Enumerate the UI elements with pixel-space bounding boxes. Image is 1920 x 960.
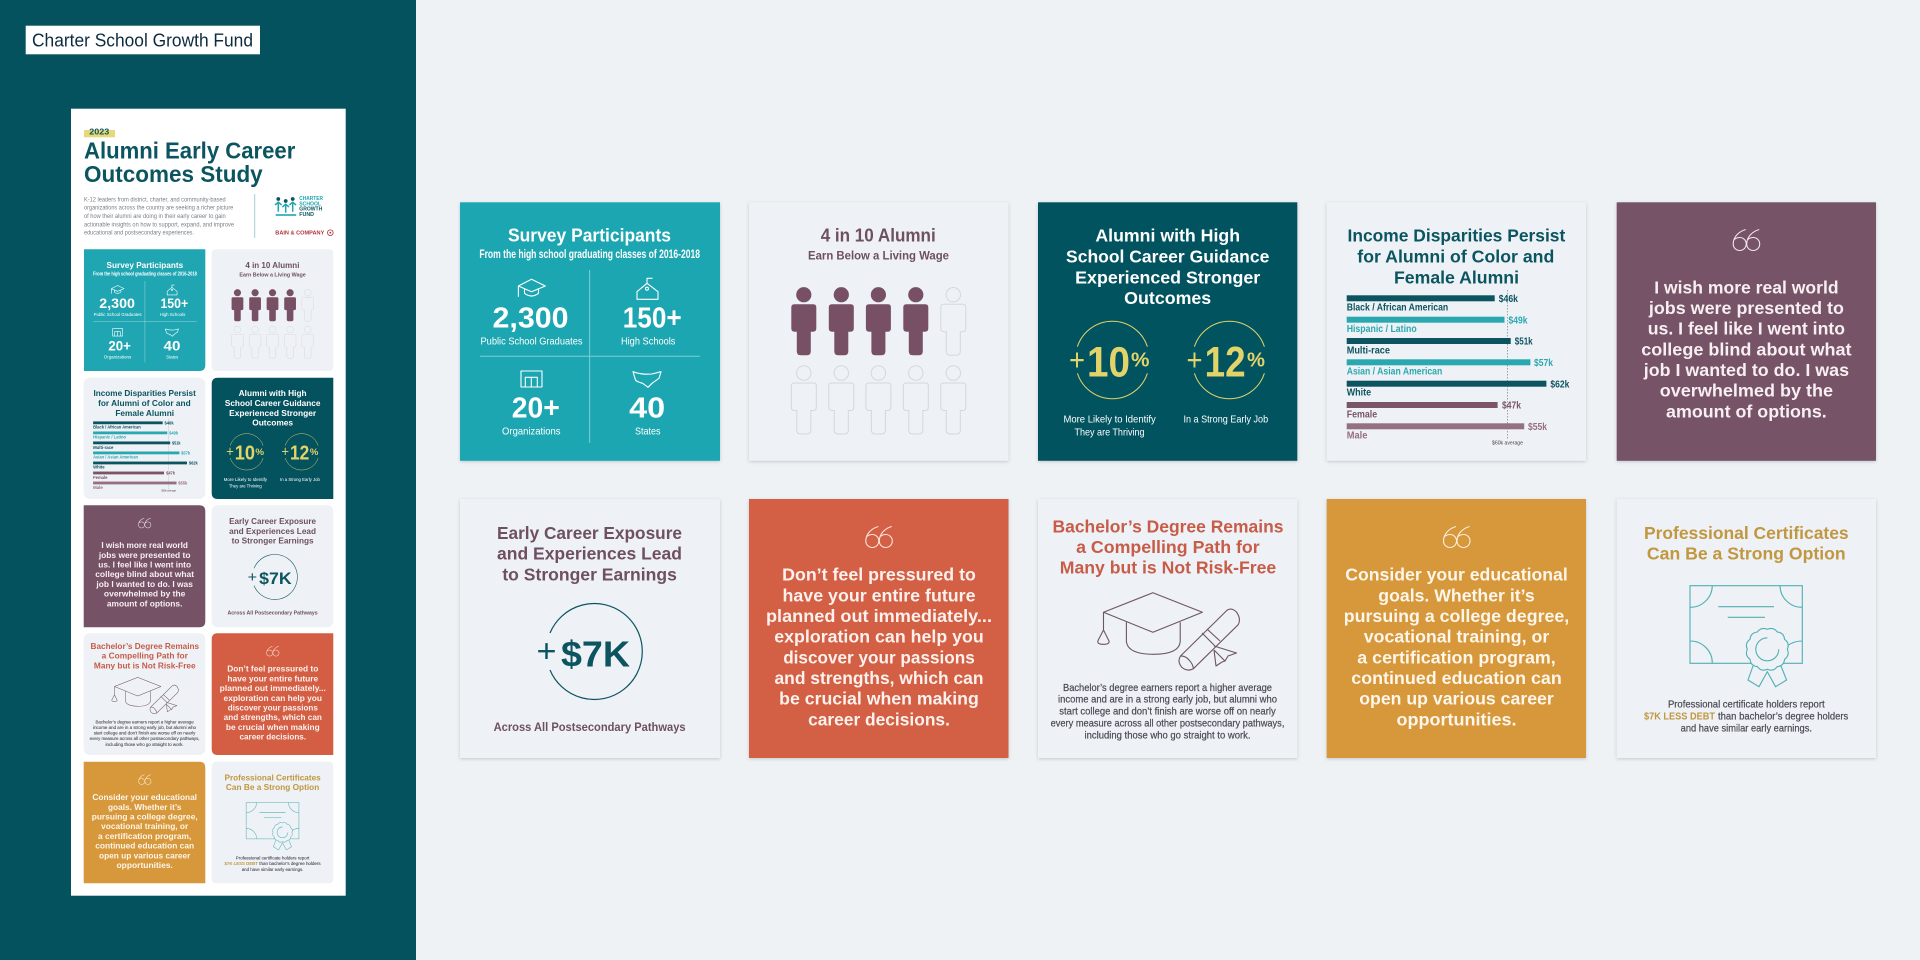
bar chart: Male (1347, 431, 1368, 442)
mini card: quote don't feel pressured: have your entire future (227, 674, 319, 683)
quote text: overwhelmed by the (1660, 381, 1833, 401)
bachelor heading: a Compelling Path for (1076, 537, 1260, 557)
survey number labels: Organizations (502, 425, 561, 437)
quote text: goals. Whether it’s (1378, 585, 1535, 605)
mini card: quote real world jobs: jobs were presented to (98, 551, 190, 560)
mini card: income disparities: Hispanic / Latino (93, 435, 126, 440)
guidance heading: Outcomes (1124, 288, 1211, 308)
mini card: quote real world jobs (84, 505, 205, 627)
bar chart: Black / African American (1347, 303, 1448, 314)
mini card: career guidance outcomes: % (255, 446, 265, 457)
mini card: early career exposure: and Experiences Lead (229, 527, 316, 536)
mini card: quote don't feel pressured: discover your passions (228, 704, 318, 713)
mini card: income disparities: Asian / Asian American (93, 455, 138, 460)
mini card: quote don't feel pressured: be crucial when making (226, 723, 320, 732)
panel: income disparities (1327, 202, 1586, 461)
survey heading: Survey Participants (508, 226, 671, 246)
quote text: a certification program, (1357, 647, 1556, 667)
mini card: income disparities: $62k (189, 461, 198, 466)
bar chart: Female (1347, 410, 1378, 421)
logo: Charter School Growth Fund: SCHOOL (299, 201, 322, 207)
mini card: quote real world jobs: job I wanted to do. I was (95, 580, 193, 589)
mini card: quote don't feel pressured (212, 633, 333, 755)
poster intro text: educational and postsecondary experiences. (84, 230, 194, 237)
income heading: Income Disparities Persist (1348, 226, 1565, 246)
survey heading: From the high school graduating classes of 2016-2018 (479, 249, 700, 261)
survey number labels: States (635, 425, 661, 437)
exposure heading: Early Career Exposure (497, 523, 682, 543)
quote text: opportunities. (1396, 709, 1516, 729)
certificates body text: than bachelor’s degree holders (1718, 711, 1848, 722)
quote text: planned out immediately... (766, 606, 992, 626)
mini card: income disparities: White (93, 465, 105, 470)
bar chart: Multi-race (1347, 346, 1390, 357)
quote text: job I wanted to do. I was (1643, 360, 1849, 380)
poster title (84, 138, 295, 187)
poster intro text: of how their alumni are doing in their early career to gain (84, 213, 226, 220)
survey heading (479, 226, 700, 261)
mini card: income disparities: $49k (169, 431, 178, 436)
mini card: income disparities: Black / African American (93, 425, 141, 430)
stat labels (1063, 413, 1268, 439)
stat labels: In a Strong Early Job (1183, 413, 1268, 425)
poster year badge (84, 128, 115, 137)
bachelor body text: Bachelor’s degree earners report a higher average (1063, 683, 1272, 694)
mini card: income disparities: $51k (172, 441, 181, 446)
exposure heading: to Stronger Earnings (502, 564, 677, 584)
icon: quotation mark (1733, 230, 1760, 250)
mini card: income disparities (84, 378, 205, 499)
stats: +10% and +12%: + (1069, 342, 1085, 377)
quote text: continued education can (1351, 668, 1562, 688)
panel: quote don't feel pressured (749, 499, 1008, 758)
panel: survey participants (460, 202, 720, 461)
mini card: income disparities: $47k (166, 471, 175, 476)
mini card: career guidance outcomes: + (281, 445, 289, 461)
mini card: bachelor's degree: start college and don’t finish are worse off on nearly (94, 731, 196, 737)
mini card: quote real world jobs: us. I feel like I went into (98, 561, 191, 570)
logo: Bain & Company: BAIN & COMPANY (275, 230, 325, 236)
mini card: quote consider your goals: a certification program, (98, 832, 191, 841)
poster intro text (84, 196, 234, 237)
survey numbers: 40 (629, 393, 665, 425)
sidebar label: organization name (26, 26, 260, 54)
mini card: 4 in 10 alumni (212, 249, 333, 371)
panel: professional certificates (1617, 499, 1876, 758)
bar chart: $51k (1515, 337, 1533, 348)
stats: +10% and +12%: % (1131, 350, 1150, 372)
outline person icons (791, 288, 966, 434)
mini card: early career exposure: Across All Postsecondary Pathways (227, 610, 318, 616)
mini card: survey participants (84, 249, 205, 371)
exposure heading: and Experiences Lead (497, 544, 682, 564)
bachelor body text: start college and don’t finish are worse off on nearly (1059, 707, 1276, 718)
bachelor body text (1051, 683, 1284, 741)
bar chart (1347, 290, 1570, 447)
income heading: for Alumni of Color and (1357, 246, 1554, 266)
stats: +10% and +12%: 10 (1087, 339, 1130, 387)
poster intro text: actionable insights on how to support, expand, and improve (84, 221, 234, 228)
bar chart: $60k average (1492, 441, 1523, 447)
poster intro text: K-12 leaders from district, charter, and community-based (84, 196, 226, 203)
bachelor heading: Many but is Not Risk-Free (1060, 558, 1276, 578)
mini card: survey participants: 2,300 (99, 296, 135, 311)
icon: quotation mark (1444, 526, 1470, 548)
icon: graduation cap and diploma (1098, 593, 1239, 670)
mini card: early career exposure: + (248, 569, 257, 586)
certificates heading (1644, 523, 1849, 564)
mini card: bachelor's degree: including those who go straight to work. (106, 742, 184, 748)
mini card: early career exposure: to Stronger Earnings (232, 537, 314, 546)
certificates body text: $7K LESS DEBT (1644, 711, 1716, 722)
mini card: income disparities: Female (93, 475, 108, 480)
mini card: quote don't feel pressured: exploration can help you (224, 694, 322, 703)
bar chart: Asian / Asian American (1347, 367, 1442, 378)
mini card: quote consider your goals: vocational training, or (101, 822, 189, 831)
quote text: career decisions. (808, 709, 950, 729)
icon: certificate with seal (1690, 586, 1802, 687)
quote text: open up various career (1359, 689, 1554, 709)
mini card: quote consider your goals: opportunities. (117, 861, 173, 870)
bar chart: Hispanic / Latino (1347, 324, 1417, 335)
stat labels: More Likely to Identify (1063, 413, 1156, 425)
mini card: quote consider your goals: open up various career (99, 851, 191, 860)
mini card: quote real world jobs: college blind about what (95, 570, 194, 579)
living wage heading (808, 226, 949, 263)
quote text: Don’t feel pressured to (782, 565, 976, 585)
mini card: career guidance outcomes: 10 (235, 443, 255, 465)
quote text (1641, 277, 1852, 421)
survey number labels: High Schools (621, 335, 675, 347)
mini card: quote don't feel pressured: career decisions. (239, 733, 306, 742)
mini card: career guidance outcomes: They are Thriving (229, 483, 262, 489)
survey numbers: 150+ (623, 302, 682, 334)
bachelor body text: every measure across all other postsecondary pathways, (1051, 718, 1284, 729)
survey number labels: Public School Graduates (480, 335, 582, 347)
stats: +10% and +12%: % (1247, 350, 1265, 372)
poster intro text: organizations across the country are seeking a richer picture (84, 205, 233, 212)
stats: +10% and +12% (1069, 339, 1265, 387)
mini card: income disparities: $55k (178, 481, 188, 486)
quote text: have your entire future (782, 585, 976, 605)
mini card: income disparities: Female Alumni (115, 409, 174, 418)
bar chart: $46k (1499, 294, 1518, 305)
guidance heading: Alumni with High (1095, 226, 1240, 246)
mini card: survey participants: Organizations (104, 354, 132, 360)
mini card: career guidance outcomes: In a Strong Early Job (280, 477, 320, 483)
mini card: quote don't feel pressured: Don’t feel pressured to (227, 665, 318, 674)
mini card: professional certificates: and have similar early earnings. (242, 867, 303, 873)
quote text (1344, 565, 1569, 729)
mini card: professional certificates: than bachelor’s degree holders (259, 861, 321, 867)
logo: Charter School Growth Fund: GROWTH (299, 207, 322, 213)
certificates heading: Professional Certificates (1644, 523, 1849, 543)
poster title: Outcomes Study (84, 161, 263, 187)
mini card: professional certificates: Professional certificate holders report (236, 856, 310, 862)
quote text: I wish more real world (1654, 277, 1839, 297)
mini card: quote real world jobs: I wish more real world (101, 541, 188, 550)
quote text: Consider your educational (1345, 565, 1568, 585)
survey icons: cap, school, building, US map (518, 278, 661, 387)
mini card: bachelor's degree: Many but is Not Risk-Free (94, 661, 196, 670)
mini card: 4 in 10 alumni: 4 in 10 Alumni (245, 260, 299, 270)
mini card: quote consider your goals: continued education can (95, 842, 194, 851)
mini card: income disparities: $60k average (161, 489, 176, 493)
stat: +$7K in ring: $7K (561, 634, 630, 675)
logo: Charter School Growth Fund: CHARTER (299, 196, 323, 202)
quote text: jobs were presented to (1648, 298, 1844, 318)
mini card: quote real world jobs: amount of options. (107, 599, 182, 608)
mini card: professional certificates: Professional Certificates (225, 774, 321, 783)
mini card: income disparities: Multi-race (93, 445, 114, 450)
quote text: college blind about what (1641, 339, 1852, 359)
panel: quote consider your goals (1327, 499, 1586, 758)
mini card: early career exposure (212, 505, 333, 627)
survey number labels (480, 335, 675, 437)
bachelor heading (1052, 516, 1284, 578)
poster title: Alumni Early Career (84, 138, 295, 164)
bachelor body text: including those who go straight to work. (1084, 730, 1250, 741)
mini card: career guidance outcomes: School Career Guidance (225, 399, 321, 408)
mini card: career guidance outcomes: + (226, 445, 234, 461)
certificates heading: Can Be a Strong Option (1647, 544, 1846, 564)
living wage heading: 4 in 10 Alumni (821, 226, 936, 246)
panel: 4 in 10 alumni (749, 202, 1008, 461)
sidebar panel (0, 0, 416, 960)
certificates body text: and have similar early earnings. (1681, 724, 1812, 735)
mini card: early career exposure: Early Career Exposure (229, 517, 316, 526)
mini card: quote consider your goals: pursuing a college degree, (92, 813, 198, 822)
quote text: amount of options. (1666, 401, 1827, 421)
quote text: exploration can help you (774, 627, 984, 647)
quote text: pursuing a college degree, (1344, 606, 1569, 626)
mini card: income disparities: for Alumni of Color and (98, 399, 191, 408)
mini card: bachelor's degree (84, 633, 205, 755)
mini card: income disparities: $46k (165, 421, 174, 426)
quote text (766, 565, 992, 729)
mini card: bachelor's degree: a Compelling Path for (102, 652, 189, 661)
mini card: quote consider your goals (84, 762, 205, 883)
mini card: bachelor's degree: income and are in a strong early job, but alumni who (93, 725, 196, 731)
quote text: us. I feel like I went into (1648, 319, 1845, 339)
mini card: quote don't feel pressured: planned out immediately... (220, 684, 326, 693)
quote text: and strengths, which can (774, 668, 984, 688)
bar chart: $57k (1534, 358, 1553, 369)
logo: Charter School Growth Fund (275, 196, 323, 218)
mini card: survey participants: 40 (164, 339, 181, 354)
mini card: career guidance outcomes: 12 (290, 443, 309, 465)
mini card: quote real world jobs: overwhelmed by the (104, 590, 186, 599)
stat labels: They are Thriving (1074, 427, 1145, 439)
income heading: Female Alumni (1394, 267, 1519, 287)
mini card: career guidance outcomes: Alumni with High (239, 389, 307, 398)
mini card: early career exposure: $7K (259, 569, 292, 588)
bar chart: $55k (1528, 422, 1547, 433)
mini card: quote consider your goals: goals. Whether it’s (108, 803, 182, 812)
mini card: career guidance outcomes: Experienced Stronger (229, 409, 317, 418)
mini card: 4 in 10 alumni: Earn Below a Living Wage (239, 272, 306, 278)
mini card: survey participants: High Schools (160, 312, 186, 318)
sidebar label: organization name: Charter School Growth Fund (32, 30, 253, 51)
mini card: career guidance outcomes: % (310, 446, 319, 457)
quote text: vocational training, or (1364, 627, 1549, 647)
mini card: survey participants: Public School Graduates (94, 312, 142, 318)
mini card: survey participants: States (166, 354, 179, 360)
stat: +$7K in ring: + (536, 633, 556, 669)
mini card: career guidance outcomes (212, 378, 333, 499)
mini card: professional certificates: $7K LESS DEBT (225, 861, 258, 867)
filled person icons (791, 287, 928, 355)
mini card: quote don't feel pressured: and strengths, which can (224, 713, 322, 722)
income heading (1348, 226, 1565, 287)
stats: +10% and +12%: + (1186, 342, 1202, 377)
panel: bachelor's degree (1038, 499, 1297, 758)
quote text: be crucial when making (779, 689, 979, 709)
mini card: quote consider your goals: Consider your educational (92, 793, 197, 802)
guidance heading (1066, 226, 1270, 308)
mini card: bachelor's degree: Bachelor’s degree earners report a higher average (95, 720, 194, 726)
stat: +$7K in ring (536, 604, 642, 700)
exposure heading (497, 523, 682, 584)
panel: early career exposure (460, 499, 720, 758)
mini card: professional certificates (212, 762, 333, 883)
certificates body text: Professional certificate holders report (1668, 699, 1825, 710)
mini card: career guidance outcomes: Outcomes (252, 418, 294, 427)
bar chart: $49k (1508, 315, 1528, 326)
mini card: income disparities: Income Disparities Persist (93, 389, 196, 398)
mini card: bachelor's degree: Bachelor’s Degree Remains (91, 642, 200, 651)
bar chart: White (1347, 388, 1371, 399)
panel: career guidance outcomes (1038, 202, 1297, 461)
certificates body text (1644, 699, 1848, 735)
stat rings (1077, 321, 1264, 399)
living wage heading: Earn Below a Living Wage (808, 249, 949, 263)
mini card: survey participants: Survey Participants (107, 260, 183, 270)
survey numbers: 20+ (512, 393, 560, 425)
mini card: professional certificates: Can Be a Strong Option (226, 783, 319, 792)
stats: +10% and +12%: 12 (1205, 339, 1246, 387)
bar chart: $62k (1550, 379, 1570, 390)
poster year badge: 2023 (89, 128, 110, 137)
poster thumbnail (71, 109, 346, 896)
mini card: bachelor's degree: every measure across all other postsecondary pathways, (90, 736, 200, 742)
bachelor heading: Bachelor’s Degree Remains (1052, 516, 1284, 536)
survey numbers: 2,300 (492, 302, 568, 334)
bar chart: $47k (1502, 401, 1521, 412)
panel: quote real world jobs (1617, 202, 1876, 461)
mini card: income disparities: Male (93, 485, 103, 490)
icon: quotation mark (866, 526, 892, 548)
guidance heading: Experienced Stronger (1075, 267, 1260, 287)
guidance heading: School Career Guidance (1066, 246, 1270, 266)
exposure caption: Across All Postsecondary Pathways (494, 720, 686, 734)
mini card: career guidance outcomes: More Likely to Identify (224, 477, 268, 483)
bachelor body text: income and are in a strong early job, but alumni who (1058, 695, 1277, 706)
mini card: survey participants: 150+ (160, 296, 188, 311)
survey numbers (492, 302, 682, 425)
mini card: survey participants: From the high school graduating classes of 2016-2018 (93, 271, 197, 277)
quote text: discover your passions (783, 647, 975, 667)
logo: Charter School Growth Fund: FUND (299, 212, 314, 218)
mini card: income disparities: $57k (181, 451, 190, 456)
mini card: survey participants: 20+ (108, 339, 131, 354)
